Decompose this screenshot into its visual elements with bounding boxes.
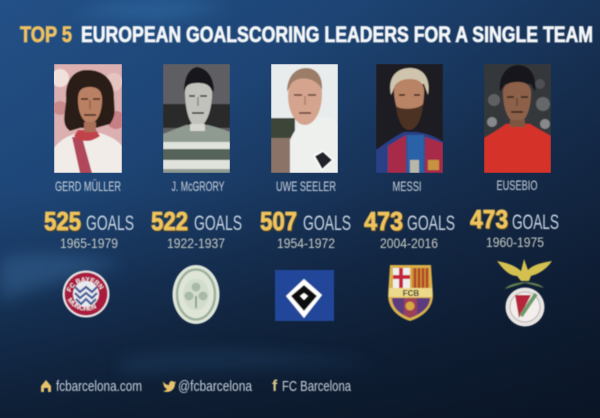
photo: Uwe Seeler	[271, 64, 338, 173]
stat: 525 goals	[44, 206, 134, 251]
logo: Bayern Munich: FC BAYERN	[66, 276, 104, 293]
player names: MESSI	[392, 178, 422, 194]
stat: 525 goals: GOALS	[86, 212, 134, 235]
stat: 473 goals Messi: GOALS	[407, 212, 455, 235]
stat: 473 goals Eusebio: GOALS	[512, 211, 559, 234]
footer: website	[41, 378, 142, 395]
footer: facebook: f	[272, 378, 278, 395]
player names: GERD MÜLLER	[55, 177, 121, 194]
footer: twitter: @fcbarcelona	[178, 378, 253, 395]
logo: Celtic	[172, 265, 220, 324]
stat: 522 goals: GOALS	[194, 212, 242, 235]
stat: 525 goals: 525	[44, 206, 81, 236]
stat: 507 goals	[260, 206, 351, 251]
stat: 507 goals: 507	[260, 206, 297, 236]
stat: 473 goals Messi	[364, 206, 455, 251]
logo: Hamburger SV	[275, 270, 334, 321]
stat: 473 goals Eusebio: 1960-1975	[486, 234, 544, 250]
player names: J. McGRORY	[172, 178, 225, 194]
stat: 507 goals: GOALS	[303, 212, 351, 235]
stat: 507 goals: 1954-1972	[277, 235, 335, 251]
player names: EUSEBIO	[496, 177, 538, 193]
footer: facebook	[272, 378, 351, 395]
stat: 473 goals Eusebio	[470, 204, 559, 250]
player names: UWE SEELER	[276, 178, 336, 194]
photo: Messi	[376, 64, 443, 173]
stat: 522 goals	[151, 206, 242, 251]
stat: 522 goals: 1922-1937	[167, 235, 225, 251]
logo: Bayern Munich: MÜNCHEN	[67, 296, 97, 312]
photo: Gerd Müller	[51, 64, 125, 173]
stat: 525 goals: 1965-1979	[60, 235, 118, 251]
player names	[55, 177, 538, 194]
footer: facebook: FC Barcelona	[282, 378, 351, 395]
footer: twitter	[163, 378, 253, 395]
logo: FC Barcelona: FCB	[403, 289, 419, 298]
photo: Eusebio	[484, 64, 551, 173]
stat: 473 goals Messi: 473	[364, 206, 403, 236]
title: TOP 5	[20, 22, 72, 47]
logo: Bayern Munich	[62, 270, 110, 318]
stat: 473 goals Eusebio: 473	[470, 204, 508, 234]
stat: 473 goals Messi: 2004-2016	[380, 235, 438, 251]
footer: website: fcbarcelona.com	[56, 378, 142, 395]
stat: 522 goals: 522	[151, 206, 188, 236]
logo: Benfica	[497, 259, 552, 326]
photo: J. McGrory	[163, 64, 230, 173]
logo: FC Barcelona	[388, 265, 433, 321]
